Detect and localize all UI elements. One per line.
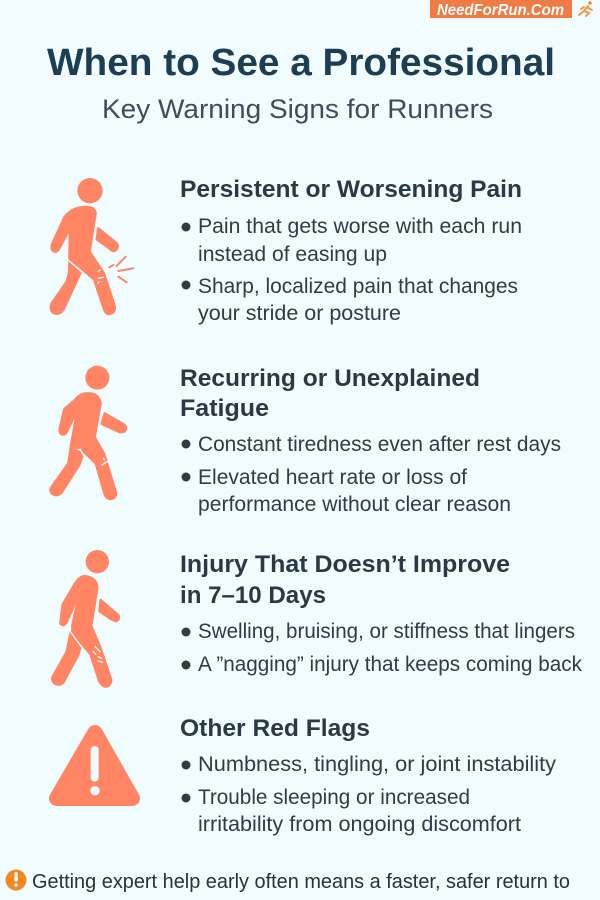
panel: recurring fatigue: [50, 365, 561, 516]
bullet list: Swelling, bruising, or stiffness that lingers: [198, 620, 575, 643]
bullet list: instead of easing up: [198, 243, 387, 266]
icon: runner logo: [579, 1, 592, 16]
heading: Fatigue: [180, 395, 269, 422]
heading: Persistent or Worsening Pain: [180, 176, 522, 203]
heading: Other Red Flags: [180, 715, 370, 742]
icon: walking figure, fatigue: [50, 366, 126, 499]
footer text: Getting expert help early often means a faster, safer return to: [32, 870, 570, 893]
panel: injury not improving: [52, 550, 582, 687]
title: When to See a Professional: [47, 42, 555, 84]
icon: warning triangle: [57, 733, 132, 798]
bullet list: your stride or posture: [198, 302, 401, 325]
bullet list: Trouble sleeping or increased: [198, 786, 470, 809]
bullet list: Sharp, localized pain that changes: [198, 275, 518, 298]
icon: walking figure with knee pain: [51, 178, 133, 314]
bullet list: Elevated heart rate or loss of: [198, 466, 467, 489]
heading: [180, 551, 510, 609]
bullet list: performance without clear reason: [198, 493, 511, 516]
icon: orange exclamation: [6, 870, 26, 890]
bullet list: A ”nagging” injury that keeps coming back: [198, 653, 582, 676]
brand badge: NeedForRun.Com: [437, 2, 564, 19]
heading: [180, 365, 480, 422]
bullet list: [182, 753, 557, 836]
bullet list: Numbness, tingling, or joint instability: [198, 753, 557, 776]
bullet list: irritability from ongoing discomfort: [198, 813, 521, 836]
heading: Recurring or Unexplained: [180, 365, 480, 392]
bullet list: [182, 433, 561, 516]
heading: in 7–10 Days: [180, 582, 326, 609]
panel: other red flags: [57, 715, 557, 836]
icon: walking figure with leg injury: [52, 550, 119, 687]
bullet list: [182, 215, 522, 325]
footer callout: [6, 870, 570, 893]
heading: Injury That Doesn’t Improve: [180, 551, 510, 578]
bullet list: [182, 620, 582, 676]
panel: persistent pain: [51, 176, 522, 325]
subtitle: Key Warning Signs for Runners: [102, 94, 493, 124]
bullet list: Pain that gets worse with each run: [198, 215, 522, 238]
bullet list: Constant tiredness even after rest days: [198, 433, 561, 456]
